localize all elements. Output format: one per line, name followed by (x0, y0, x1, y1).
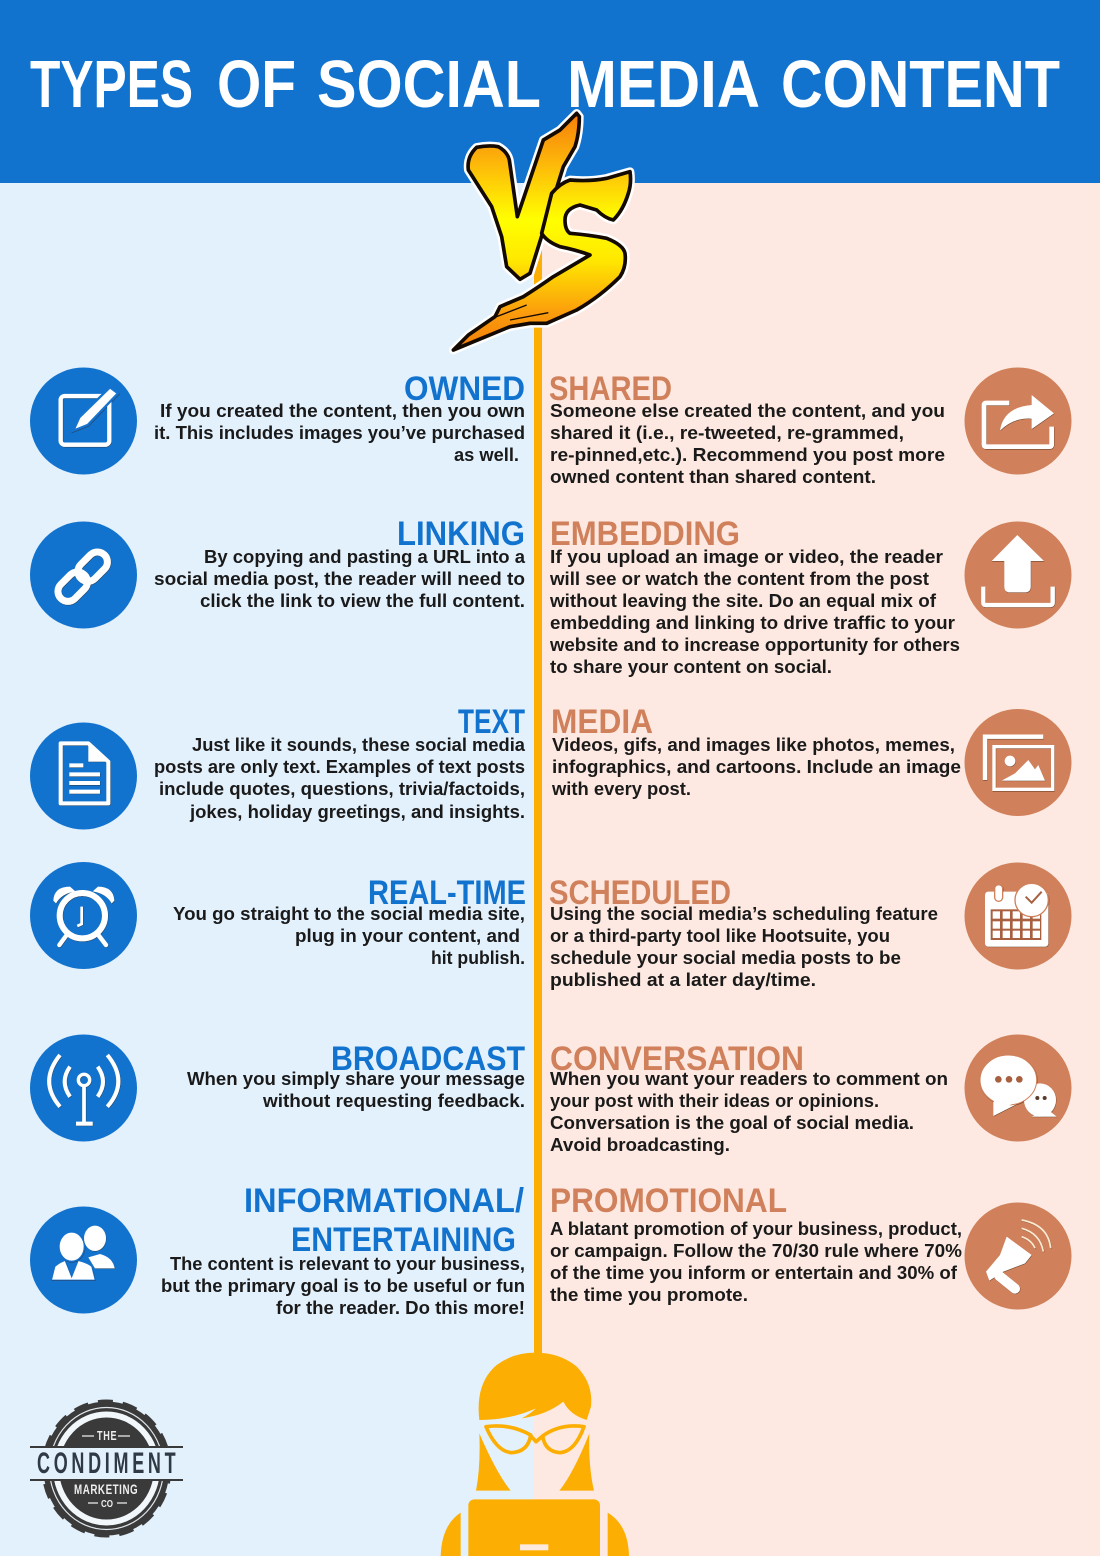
text: real-time: plug in your content, and (295, 925, 520, 946)
heading: informational / entertaining: INFORMATIONAL/ (244, 1182, 525, 1220)
logo: The Condiment Marketing Co: CO (101, 1498, 113, 1509)
section: embedding (549, 515, 1072, 677)
text: promotional: of the time you inform or entertain and 30% of (550, 1262, 958, 1283)
text: informational: The content is relevant to your business, (170, 1253, 525, 1274)
text: linking (154, 546, 526, 611)
section: broadcast (30, 1034, 525, 1142)
text: shared: Someone else created the content, and you (550, 400, 945, 421)
text: shared: re-pinned,etc.). Recommend you post more (550, 444, 945, 465)
heading: embedding: EMBEDDING (550, 515, 740, 553)
title: SOCIAL (317, 47, 541, 122)
text: owned: If you created the content, then you own (160, 400, 525, 421)
text: conversation: Avoid broadcasting. (550, 1134, 730, 1155)
text: promotional (550, 1218, 962, 1305)
header banner (0, 0, 1100, 183)
text: scheduled: or a third-party tool like Hootsuite, you (550, 925, 890, 946)
text: text posts: include quotes, questions, trivia/factoids, (159, 778, 525, 799)
section: promotional (550, 1182, 1072, 1310)
icon: people (30, 1206, 137, 1314)
illustration: woman at laptop (441, 1353, 629, 1556)
text: informational: for the reader. Do this more! (276, 1297, 525, 1318)
hair: sides (476, 1433, 594, 1491)
text: broadcast (187, 1068, 525, 1111)
laptop (468, 1499, 600, 1556)
text: shared: shared it (i.e., re-tweeted, re-grammed, (550, 422, 904, 443)
text: text posts: Just like it sounds, these social media (192, 734, 526, 755)
text: broadcast: without requesting feedback. (262, 1090, 525, 1111)
text: owned: as well. (454, 444, 519, 465)
text: scheduled: Using the social media’s scheduling feature (550, 903, 938, 924)
text: real-time: You go straight to the social media site, (173, 903, 525, 924)
logo: The Condiment Marketing Co: CONDIMENT (37, 1448, 176, 1480)
text: media (551, 734, 961, 799)
title: CONTENT (781, 47, 1060, 122)
text: text posts: posts are only text. Examples of text posts (154, 756, 525, 777)
text: embedding: without leaving the site. Do an equal mix of (549, 590, 937, 611)
title: TYPES (30, 47, 193, 122)
icon: edit (30, 368, 137, 474)
icon: antenna (30, 1034, 137, 1142)
text: promotional: the time you promote. (550, 1284, 748, 1305)
text: embedding: If you upload an image or video, the reader (550, 546, 943, 567)
text: linking: social media post, the reader will need to (154, 568, 525, 589)
title: OF (217, 47, 296, 122)
text: embedding: embedding and linking to drive traffic to your (550, 612, 955, 633)
hair: fringe (479, 1353, 591, 1420)
heading: conversation: CONVERSATION (550, 1040, 804, 1078)
text: promotional: or campaign. Follow the 70/30 rule where 70% (550, 1240, 962, 1261)
text: text posts: jokes, holiday greetings, and insights. (189, 801, 525, 822)
background: right panel (534, 183, 1100, 1556)
shoulders (441, 1513, 629, 1556)
text: text posts (154, 734, 526, 822)
section: scheduled (549, 862, 1072, 990)
text: shared: owned content than shared content. (550, 466, 876, 487)
icon: calendar (964, 862, 1072, 970)
section: linking (30, 515, 526, 628)
text: scheduled: schedule your social media posts to be (550, 947, 901, 968)
text: conversation (550, 1068, 948, 1155)
icon: upload (964, 522, 1072, 628)
text: shared (550, 400, 945, 487)
heading: media: MEDIA (551, 703, 653, 741)
logo: The Condiment Marketing Co: MARKETING (74, 1481, 138, 1497)
text: informational (161, 1253, 525, 1318)
logo: The Condiment Marketing Co: THE (97, 1430, 117, 1443)
heading: shared: SHARED (549, 370, 672, 408)
heading: owned: OWNED (404, 370, 525, 408)
heading: broadcast: BROADCAST (331, 1040, 525, 1078)
text: embedding: will see or watch the content from the post (549, 568, 929, 589)
icon: chat bubbles (964, 1034, 1072, 1142)
icon: document (30, 722, 137, 830)
icon: megaphone (964, 1202, 1072, 1310)
text: real-time (173, 903, 525, 968)
text: embedding (549, 546, 960, 677)
text: linking: By copying and pasting a URL into a (204, 546, 526, 567)
text: scheduled (550, 903, 938, 990)
text: broadcast: When you simply share your message (187, 1068, 525, 1089)
text: media: with every post. (551, 778, 691, 799)
text: promotional: A blatant promotion of your business, product, (550, 1218, 962, 1239)
section: shared (549, 368, 1072, 487)
heading: promotional: PROMOTIONAL (550, 1182, 787, 1220)
section: informational / entertaining (30, 1182, 525, 1318)
heading: informational / entertaining (244, 1182, 525, 1259)
logo: The Condiment Marketing Co (30, 1401, 183, 1536)
icon: link (30, 522, 137, 628)
section: media (551, 703, 1072, 816)
heading: real-time: REAL-TIME (368, 874, 526, 912)
center divider (534, 250, 542, 1360)
title (30, 47, 1060, 122)
section: text (30, 703, 526, 830)
text: media: Videos, gifs, and images like photos, memes, (552, 734, 955, 755)
background: left panel (0, 183, 534, 1556)
icon: VS flame logo (453, 113, 631, 350)
icon: share (964, 368, 1072, 474)
section: owned (30, 368, 525, 474)
text: scheduled: published at a later day/time. (550, 969, 816, 990)
heading: informational / entertaining: ENTERTAINING (291, 1221, 516, 1259)
text: owned: it. This includes images you’ve purchased (154, 422, 525, 443)
text: owned (154, 400, 525, 465)
text: conversation: Conversation is the goal of social media. (550, 1112, 914, 1133)
text: real-time: hit publish. (431, 947, 525, 968)
heading: text: TEXT (458, 703, 525, 741)
heading: scheduled: SCHEDULED (549, 874, 731, 912)
section: conversation (550, 1034, 1072, 1155)
section: real-time (30, 862, 526, 969)
icon: images (964, 709, 1072, 816)
heading: linking: LINKING (397, 515, 525, 553)
glasses (486, 1426, 584, 1453)
title: MEDIA (567, 47, 760, 122)
text: media: infographics, and cartoons. Include an image (552, 756, 961, 777)
text: conversation: your post with their ideas or opinions. (550, 1090, 879, 1111)
text: informational: but the primary goal is to be useful or fun (161, 1275, 525, 1296)
text: conversation: When you want your readers to comment on (550, 1068, 948, 1089)
text: embedding: website and to increase opportunity for others (549, 634, 960, 655)
text: embedding: to share your content on social. (550, 656, 832, 677)
text: linking: click the link to view the full content. (200, 590, 525, 611)
icon: alarm clock (30, 862, 137, 969)
